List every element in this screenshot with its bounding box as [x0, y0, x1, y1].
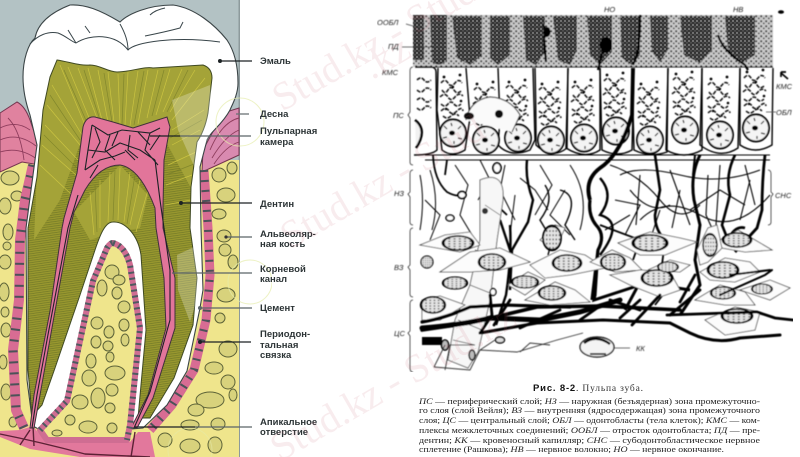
interradicular bone — [40, 243, 140, 440]
gum left — [0, 102, 40, 172]
arrow — [781, 72, 788, 79]
tooth labels: Апикальное — [260, 417, 317, 428]
odontoblast cell row — [414, 67, 773, 160]
dentin fibres — [40, 65, 205, 235]
caption body: сплетение (Рашкова); НВ — нервное волокно; НО — нервное окончание. — [419, 445, 724, 454]
watermarks: Stud.kz - Stud — [272, 105, 492, 258]
tooth labels: Десна — [260, 109, 289, 120]
fibroblasts — [420, 225, 790, 335]
histology labels: КМС — [382, 68, 399, 77]
histology labels: КМС — [776, 82, 793, 91]
dentin stippled band — [413, 15, 773, 67]
nerve endings — [543, 15, 748, 70]
leader lines — [135, 59, 252, 427]
tooth labels: Корневой — [260, 264, 306, 275]
capillary — [580, 337, 630, 357]
tooth labels: связка — [260, 350, 292, 361]
crown ridge lines — [30, 8, 220, 50]
black nerve trunk — [422, 337, 442, 345]
tooth labels: ная кость — [260, 239, 305, 250]
tooth labels: Дентин — [260, 199, 294, 210]
histology labels: НЗ — [394, 189, 404, 198]
tooth labels: Альвеоляр- — [260, 229, 316, 240]
central zone cell mesh — [434, 333, 583, 370]
diagram: dental pulp histology — [377, 5, 793, 372]
caption body: слоя; ЦС — центральный слой; ОБЛ — одонтобласты (тела клеток); КМС — ком- — [419, 416, 760, 425]
gum right — [202, 108, 239, 172]
grey backdrop — [0, 0, 239, 230]
periodontal ligament — [13, 165, 210, 430]
pulp chamber and canals — [30, 117, 175, 428]
tooth labels: Эмаль — [260, 56, 291, 67]
watermarks: .kz — [354, 25, 418, 88]
subodontoblastic nerve fibres, cell-free zone — [420, 68, 770, 325]
histology labels: НО — [604, 5, 615, 14]
fibroblast nuclei — [421, 226, 772, 323]
tooth body: enamel and cementum — [23, 5, 238, 430]
diagram: tooth cross-section — [0, 0, 272, 457]
histology labels: ЦС — [394, 329, 405, 338]
tooth labels: канал — [260, 274, 287, 285]
pointer lines — [402, 24, 776, 112]
zone braces — [408, 67, 773, 372]
central nerve plexus — [422, 270, 793, 341]
tooth labels — [260, 56, 317, 438]
histology labels: НВ — [733, 5, 743, 14]
alveolar bone — [0, 160, 239, 457]
tooth labels: Пульпарная — [260, 126, 317, 137]
histology labels: ВЗ — [394, 263, 404, 272]
caption title: Рис. 8-2. Пульпа зуба. — [533, 383, 643, 394]
histology labels: СНС — [775, 191, 792, 200]
histology labels: ПД — [388, 42, 399, 51]
caption body: ПС — периферический слой; НЗ — наружная (безъядерная) зона промежуточно- — [418, 397, 760, 406]
caption body: дентин; КК — кровеносный капилляр; СНС — субодонтобластическое нервное — [419, 436, 761, 445]
tooth labels: Цемент — [260, 303, 295, 314]
histology labels — [377, 5, 793, 353]
odontoblast processes — [413, 15, 755, 65]
bottom vessels band — [0, 426, 155, 457]
caption body: го слоя (слой Вейля); ВЗ — внутренняя (ядросодержащая) зона промежуточного — [419, 406, 760, 415]
watermarks — [262, 0, 525, 457]
tooth labels: тальная — [260, 340, 298, 351]
histology labels: ОБЛ — [776, 108, 792, 117]
caption body — [418, 397, 761, 454]
translucent watermark logo patches — [172, 85, 214, 168]
dentin edge — [28, 60, 212, 418]
tooth labels: камера — [260, 137, 294, 148]
histology labels: ПС — [393, 111, 404, 120]
dentin — [28, 60, 212, 418]
histology labels: КК — [636, 344, 645, 353]
pale lamellar cell column — [442, 163, 504, 368]
histology labels: ООБЛ — [377, 18, 399, 27]
tooth labels: отверстие — [260, 427, 308, 438]
figure caption — [418, 383, 761, 454]
caption body: плексы межклеточных соединений; ООБЛ — отросток одонтобласта; ПД — пре- — [419, 426, 760, 435]
tooth labels: Периодон- — [260, 329, 310, 340]
pulp vessel network — [32, 125, 170, 428]
